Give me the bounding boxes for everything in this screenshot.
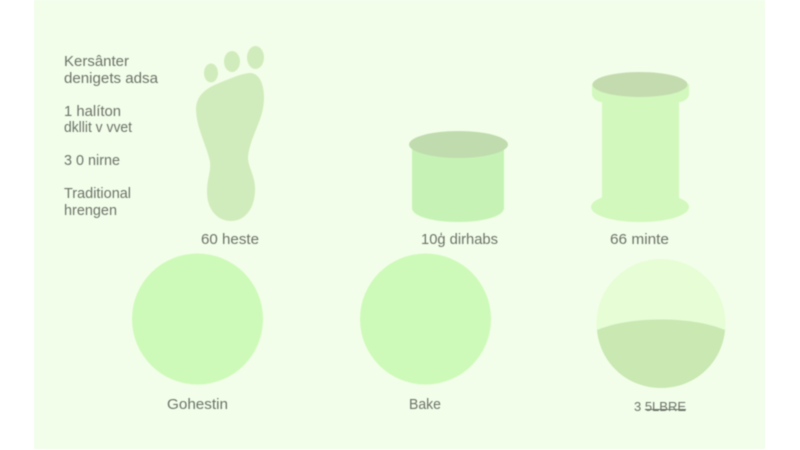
label: half-filled circle: 3 5LBRE (634, 399, 686, 414)
text block: left descriptions: 1 halíton (64, 103, 121, 120)
text block: left descriptions: hrengen (64, 202, 117, 219)
text block: left descriptions: Traditional (64, 185, 131, 202)
text block: left descriptions (64, 53, 159, 219)
icon: tall spool cylinder (591, 72, 689, 222)
icon: footprint (196, 46, 264, 221)
label: tall cylinder: 66 minte (610, 231, 669, 248)
icon: circle two (360, 254, 491, 384)
label: short cylinder: 10ģ dirhabs (421, 231, 498, 248)
icon: circle one (132, 254, 263, 384)
label: foot: 60 heste (201, 231, 259, 248)
label: circle one: Gohestin (167, 396, 228, 413)
label: circle two: Bake (409, 396, 441, 413)
text block: left descriptions: 3 0 nirne (64, 152, 120, 169)
icon: short cylinder (409, 131, 508, 222)
text block: left descriptions: Kersânter (64, 53, 129, 70)
text block: left descriptions: dkllit v vvet (64, 119, 133, 136)
icon: half-filled circle (596, 259, 726, 388)
text block: left descriptions: denigets adsa (64, 70, 159, 87)
